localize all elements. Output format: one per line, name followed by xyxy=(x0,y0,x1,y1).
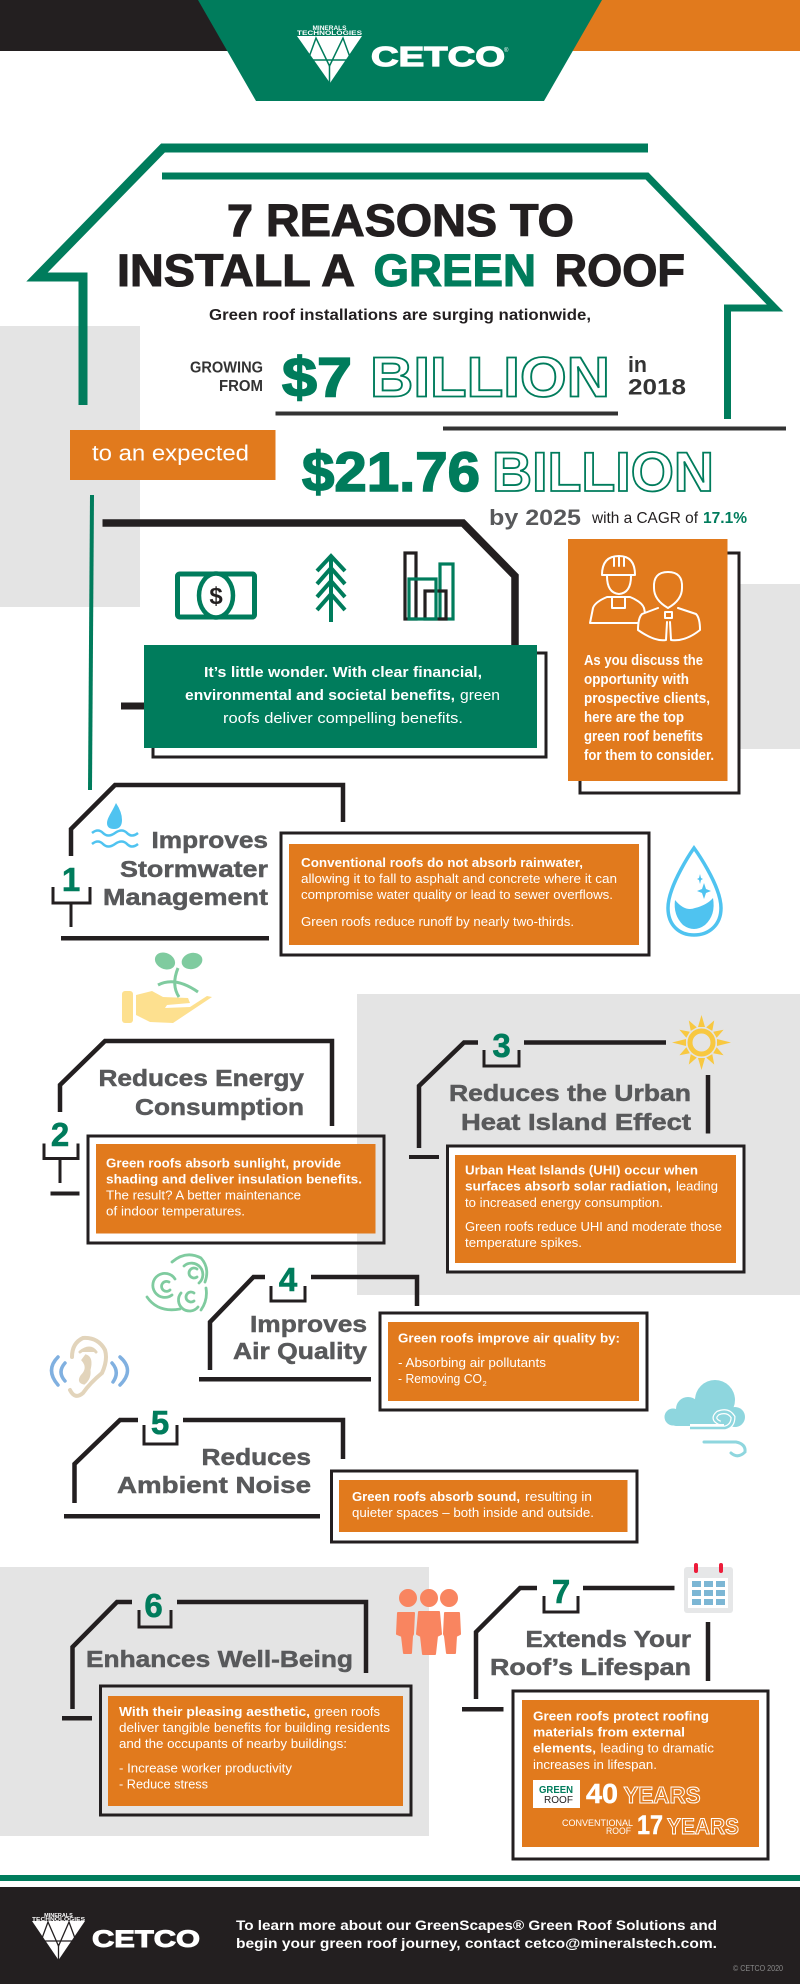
logo: CETCO footer: TECHNOLOGIES xyxy=(32,1917,86,1923)
callout: to an expected xyxy=(70,430,276,480)
icon: money: $ xyxy=(209,583,223,610)
heading: Reduces the Urban xyxy=(449,1080,691,1106)
badge: conventional roof 17 years: ROOF xyxy=(606,1826,631,1837)
heading: Improves xyxy=(250,1311,367,1337)
panel: reason 4 air quality xyxy=(199,1261,647,1410)
logo: CETCO header xyxy=(297,25,509,83)
icon: money xyxy=(178,574,254,618)
heading: Ambient Noise xyxy=(117,1472,311,1498)
text box: to increased energy consumption. xyxy=(465,1196,663,1210)
text box: Green roofs protect roofing xyxy=(533,1710,709,1724)
text box: of indoor temperatures. xyxy=(106,1204,245,1218)
logo: CETCO footer: MINERALS xyxy=(44,1913,73,1919)
title: ROOF xyxy=(554,245,685,296)
logo: CETCO header: MINERALS xyxy=(313,25,347,32)
text box: leading xyxy=(676,1180,718,1194)
number 3: 3 xyxy=(492,1027,511,1064)
number 5: 5 xyxy=(151,1404,169,1441)
icon: large water drop xyxy=(668,848,721,935)
text: intro: environmental and societal benefits, xyxy=(185,687,455,704)
panel: reason 2 energy xyxy=(44,1041,384,1243)
heading xyxy=(117,1444,311,1498)
text box: green roofs xyxy=(314,1705,380,1719)
heading xyxy=(103,827,268,910)
text box: leading to dramatic xyxy=(600,1742,714,1756)
footer green rule xyxy=(0,1875,800,1881)
icon: cloud and wind xyxy=(664,1380,745,1456)
text box: Conventional roofs do not absorb rainwater, xyxy=(301,856,583,870)
badge: conventional roof 17 years: CONVENTIONAL xyxy=(562,1818,633,1829)
panel: benefits intro xyxy=(102,523,546,757)
panel: discuss with clients xyxy=(568,539,739,793)
stat: $21.76 billion by 2025: BILLION xyxy=(492,440,714,503)
heading: Air Quality xyxy=(233,1338,367,1364)
text: intro: roofs deliver compelling benefits. xyxy=(223,710,463,727)
text box xyxy=(380,1313,647,1410)
badge: green roof 40 years: ROOF xyxy=(544,1794,573,1806)
icon: sun xyxy=(672,1015,731,1070)
number 7: 7 xyxy=(552,1573,570,1610)
heading: Extends Your xyxy=(526,1626,691,1652)
panel: reason 1 stormwater xyxy=(53,785,721,955)
footer call to action: To learn more about our GreenScapes® Green Roof Solutions and xyxy=(236,1917,717,1933)
stat: $21.76 billion by 2025: with a CAGR of xyxy=(591,510,699,527)
text box: The result? A better maintenance xyxy=(106,1188,301,1202)
background: gray panels xyxy=(0,326,800,1836)
footer xyxy=(0,1887,800,1984)
text box: - Increase worker productivity xyxy=(119,1762,293,1776)
heading xyxy=(490,1626,691,1680)
icon: tree xyxy=(317,556,345,622)
number 2: 2 xyxy=(51,1116,69,1153)
logo: CETCO header: TECHNOLOGIES xyxy=(297,31,362,37)
subtitle: Green roof installations are surging nationwide, xyxy=(209,307,591,324)
footer call to action: begin your green roof journey, contact cetco@mineralstech.com. xyxy=(236,1935,717,1951)
stat: $7 billion in 2018: GROWING xyxy=(190,360,263,376)
text: discuss: green roof benefits xyxy=(584,729,703,745)
text box: temperature spikes. xyxy=(465,1236,582,1250)
text box: Green roofs improve air quality by: xyxy=(398,1332,620,1346)
green vertical line xyxy=(90,495,92,790)
text: intro: green xyxy=(460,687,500,704)
badge: green roof 40 years xyxy=(533,1778,700,1809)
text: intro: It’s little wonder. With clear financial, xyxy=(204,664,482,681)
copyright: © CETCO 2020 xyxy=(733,1964,783,1973)
text box xyxy=(448,1146,744,1272)
panel: reason 6 well-being xyxy=(62,1587,411,1815)
stat: $7 billion in 2018 xyxy=(190,346,786,430)
stat: $7 billion in 2018: $7 xyxy=(282,346,352,408)
icon: hand with sprout xyxy=(122,949,212,1023)
title xyxy=(117,195,685,296)
badge: conventional roof 17 years: 17 xyxy=(637,1810,663,1840)
text box: 2 xyxy=(482,1379,487,1388)
icon: worker and manager xyxy=(590,556,700,640)
heading xyxy=(233,1311,367,1364)
stat: $21.76 billion by 2025: 17.1% xyxy=(703,510,747,527)
text box xyxy=(100,1686,411,1815)
heading: Management xyxy=(103,884,268,910)
badge: green roof 40 years: GREEN xyxy=(539,1784,573,1796)
heading: Stormwater xyxy=(120,856,268,882)
badge: conventional roof 17 years xyxy=(562,1810,739,1840)
text box xyxy=(332,1471,637,1542)
text: discuss: prospective clients, xyxy=(584,691,710,707)
logo: CETCO header: CETCO xyxy=(371,41,505,72)
text box xyxy=(281,833,649,955)
text box: and the occupants of nearby buildings: xyxy=(119,1737,347,1751)
logo: CETCO footer xyxy=(32,1913,200,1960)
heading: Reduces xyxy=(202,1444,311,1470)
text box: compromise water quality or lead to sewer overflows. xyxy=(301,888,613,902)
panel: reason 5 ambient noise xyxy=(64,1404,637,1542)
icon: water and waves xyxy=(92,803,138,846)
text box: deliver tangible benefits for building residents xyxy=(119,1721,390,1735)
number 6: 6 xyxy=(144,1587,163,1624)
house outline: green roof xyxy=(37,148,775,419)
icon: calendar xyxy=(684,1563,733,1613)
heading xyxy=(98,1065,304,1120)
heading: Enhances Well-Being xyxy=(86,1646,353,1672)
text box: With their pleasing aesthetic, xyxy=(119,1705,310,1719)
panel: reason 3 urban heat island xyxy=(409,1015,744,1272)
text box: allowing it to fall to asphalt and concrete where it can xyxy=(301,872,617,886)
header band xyxy=(0,0,800,101)
text box: Urban Heat Islands (UHI) occur when xyxy=(465,1164,698,1178)
text box: - Absorbing air pollutants xyxy=(398,1356,546,1370)
text: intro xyxy=(185,664,500,727)
stat: $7 billion in 2018: in xyxy=(628,352,647,377)
number 1: 1 xyxy=(62,861,80,898)
stat: $7 billion in 2018: 2018 xyxy=(628,374,686,400)
heading: Reduces Energy xyxy=(98,1065,304,1091)
heading: Consumption xyxy=(135,1094,304,1120)
text box: Green roofs absorb sunlight, provide xyxy=(106,1156,341,1170)
icon: bar chart xyxy=(405,553,453,619)
heading xyxy=(449,1080,691,1135)
text box: - Removing CO xyxy=(398,1372,482,1386)
title: GREEN xyxy=(374,245,536,296)
text box: materials from external xyxy=(533,1726,685,1740)
callout: to an expected: to an expected xyxy=(92,440,249,466)
badge: conventional roof 17 years: YEARS xyxy=(667,1814,739,1839)
logo: CETCO footer: CETCO xyxy=(92,1926,200,1953)
text box: increases in lifespan. xyxy=(533,1758,657,1772)
number 4: 4 xyxy=(279,1261,298,1298)
text box: Green roofs reduce UHI and moderate those xyxy=(465,1220,722,1234)
text box: Green roofs reduce runoff by nearly two-thirds. xyxy=(301,915,574,929)
text: discuss: opportunity with xyxy=(584,672,689,688)
footer call to action xyxy=(236,1917,717,1951)
text box xyxy=(88,1136,384,1243)
stat: $21.76 billion by 2025 xyxy=(302,440,747,530)
badge: green roof 40 years: YEARS xyxy=(624,1782,700,1808)
text box: - Reduce stress xyxy=(119,1778,208,1792)
text: discuss: here are the top xyxy=(584,710,684,726)
icon: ear with sound waves xyxy=(52,1338,128,1396)
text: discuss: for them to consider. xyxy=(584,748,714,764)
text box xyxy=(513,1691,768,1859)
text box: shading and deliver insulation benefits. xyxy=(106,1172,362,1186)
text box: resulting in xyxy=(525,1490,592,1504)
text box: quieter spaces – both inside and outside. xyxy=(352,1506,594,1520)
stat: $21.76 billion by 2025: by 2025 xyxy=(489,505,581,530)
text: discuss xyxy=(584,653,714,764)
text box: Green roofs absorb sound, xyxy=(352,1490,520,1504)
logo: CETCO header: ® xyxy=(504,47,509,54)
heading: Roof’s Lifespan xyxy=(490,1654,691,1680)
heading: Heat Island Effect xyxy=(461,1109,691,1135)
panel: reason 7 roof lifespan xyxy=(462,1563,768,1859)
stat: $7 billion in 2018: BILLION xyxy=(370,346,610,410)
text box: surfaces absorb solar radiation, xyxy=(465,1180,671,1194)
text: discuss: As you discuss the xyxy=(584,653,703,669)
icon: people xyxy=(397,1590,460,1654)
heading: Improves xyxy=(152,827,268,853)
icon: air swirl xyxy=(147,1255,207,1311)
badge: green roof 40 years: 40 xyxy=(586,1778,618,1809)
stat: $7 billion in 2018: FROM xyxy=(219,378,263,395)
stat: $21.76 billion by 2025: $21.76 xyxy=(302,440,480,503)
text box: elements, xyxy=(533,1742,596,1756)
title: 7 REASONS TO xyxy=(227,195,574,246)
title: INSTALL A xyxy=(117,245,355,296)
